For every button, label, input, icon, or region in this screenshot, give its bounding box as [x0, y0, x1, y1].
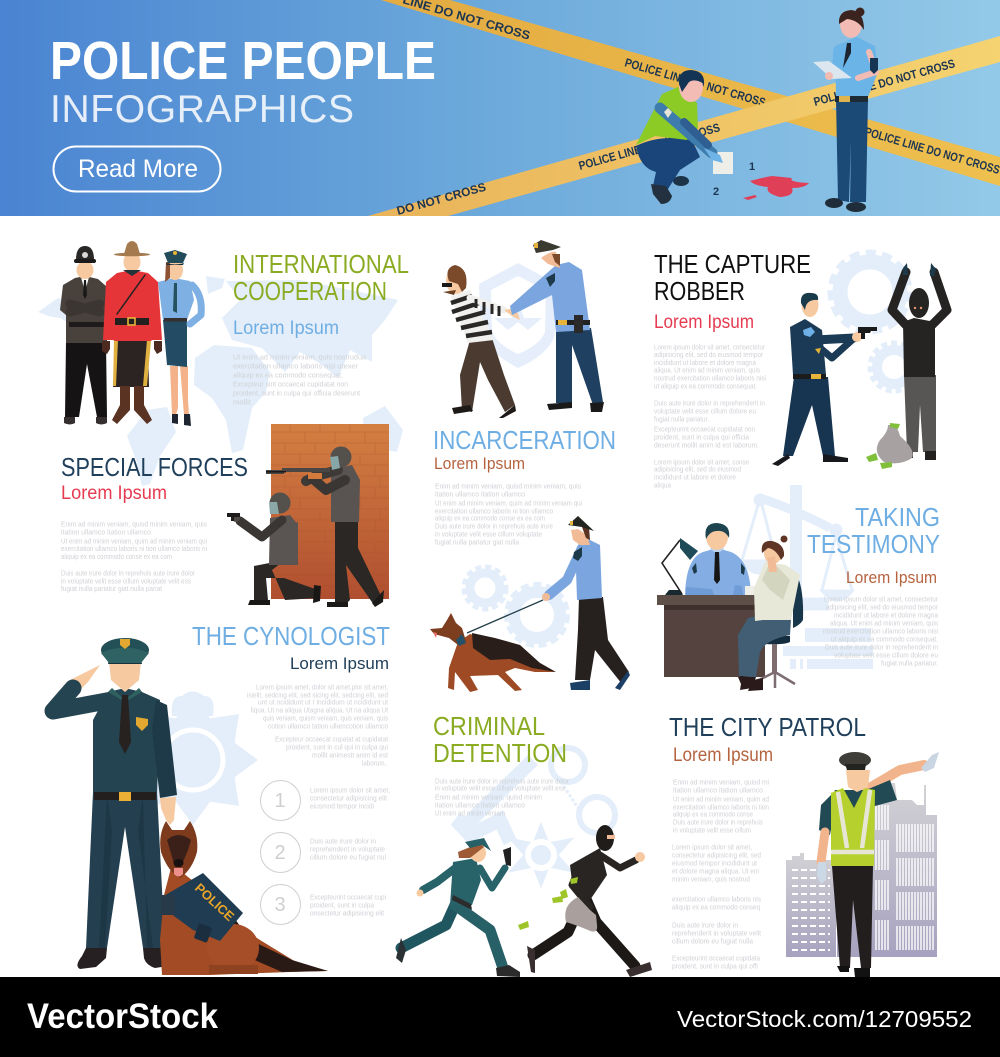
- police tape: bottom: POLICE LINE DO NOT CROSS: [812, 56, 956, 109]
- body text: Ut enim ad minim veniam, quim ad minim veniam qui: [61, 536, 207, 546]
- police tape: top: [381, 0, 1000, 186]
- body text: incididunt ut labore et dolore: [654, 472, 736, 482]
- panel: the capture robber: [654, 249, 947, 490]
- body text: proident, sunt in culpa qui officia: [654, 432, 750, 442]
- body text: isielit, sedcing elit, sed sicing elit, sedcing elit, sed: [247, 690, 388, 700]
- body text: [435, 482, 582, 546]
- heading: TESTIMONY: [807, 529, 940, 559]
- body text: laborum..: [362, 758, 388, 768]
- standing soldier: [266, 446, 384, 607]
- officer with clipboard: [813, 8, 878, 212]
- icon: masked robber hands up: [892, 263, 947, 460]
- kneeling soldier: [227, 492, 321, 605]
- body text: [435, 776, 569, 818]
- bobby officer: [60, 246, 107, 424]
- body text: voluptate velit esse cillum dolore eu: [654, 406, 756, 416]
- heading: TAKING: [855, 502, 940, 532]
- heading: [433, 711, 567, 768]
- crime scene: evidence and blood: 1: [749, 161, 755, 173]
- body text: aliqua. Ut enim ad minim veniam, quis: [654, 366, 760, 374]
- body text: exercitation ullamco laboris nisi utexer: [233, 362, 359, 370]
- body text: Ut enim ad minim veniam, quim ad: [673, 794, 769, 804]
- body text: voluptate velit esse cillum dolore eu: [834, 650, 938, 660]
- body text: Duis aute irure dolor in reprehuis: [673, 818, 763, 826]
- heading: THE CITY PATROL: [669, 712, 866, 742]
- mountie officer: [102, 241, 162, 424]
- crime scene: evidence and blood: [713, 152, 809, 200]
- body text: quis veniam, quism veniam, quis veniam, quis: [263, 714, 388, 722]
- body text: in voluptate velit esse cillum voluptate: [435, 530, 542, 538]
- numbered item 1: Lorem ipsum dolor sit amet,: [310, 786, 390, 794]
- numbered item 3: onsectetur adipisicing elit: [310, 908, 384, 918]
- body text: fugiat nulla pariatur giat nulla pariat: [61, 584, 162, 593]
- icon: desk: [657, 595, 765, 677]
- numbered item 1: consectetur adipisicing elit: [310, 794, 387, 802]
- icon: running masked robber: [518, 825, 652, 977]
- panel: criminal detention: [396, 711, 652, 977]
- body text: minim veniam, quis nostrud: [672, 874, 750, 884]
- icon: lamp: [662, 538, 698, 595]
- body text: unt ut ncididunt ut r incididum ut ncididunt ut: [258, 698, 388, 706]
- body text: [233, 352, 367, 406]
- body text: Duis aute irure dolor in: [672, 920, 738, 930]
- body text: mollit: [233, 398, 251, 406]
- body text: aliquip ex ea commodo conse ex ea com: [435, 514, 545, 522]
- body text: reprehenderit in voluptate velit: [672, 928, 761, 938]
- body text: itation ullamco itation ullamco: [673, 786, 763, 794]
- body text: Lorem ipsum amet, dolor sit amet,plor sit amet,: [256, 682, 388, 692]
- body text: [654, 342, 766, 490]
- body text: Duis aute irure dolor in reprehuis aute irure dolor: [61, 568, 195, 578]
- officer: [542, 516, 630, 690]
- policewoman: [158, 250, 201, 426]
- heading: [654, 249, 811, 306]
- body text: exercitation ullamco laboris ni tion ullamco laboris ni: [61, 544, 207, 553]
- subheading: Lorem Ipsum: [673, 745, 773, 766]
- body text: in voluptate velit esse cillum: [673, 826, 751, 834]
- body text: aliquip ex ea commodo conse: [673, 810, 753, 818]
- crime scene: evidence and blood: 2: [713, 186, 719, 198]
- body text: deserunt mollit anim id est laborum.: [654, 440, 759, 450]
- icon: officer walking dog: [430, 516, 630, 692]
- subheading: Lorem Ipsum: [654, 312, 754, 333]
- numbered item 1: eiusmod tempor incidi: [310, 802, 374, 810]
- body text: aliquip ex ea commodo conse ex ea com: [61, 552, 172, 561]
- header banner: [0, 0, 1000, 218]
- icon: officer arresting robber: [442, 240, 604, 418]
- body text: [247, 682, 388, 768]
- body text: Excepteur occaecat cupatat at cupidatat: [275, 734, 388, 744]
- body text: liqua. Ut na aliqua Utagna aliqua. Ut na aliqua Ut: [251, 706, 388, 714]
- numbered item 2: 2: [274, 842, 286, 864]
- body text: consectetur adipisicing elit, sed: [672, 850, 761, 860]
- footer logo text: VectorStock: [27, 997, 219, 1036]
- heading: CRIMINAL: [433, 711, 545, 741]
- body text: Duis aute irure dolor in reprehuis aute irure: [435, 522, 553, 530]
- body text: exercitation ullamco laboris ni tion ullamco: [435, 506, 553, 516]
- numbered item 3: 3: [274, 894, 286, 916]
- body text: in voluptate velit esse cillum voluptate velit ess: [435, 784, 565, 792]
- body text: exercitation ullamco laboris ni tion: [673, 802, 769, 812]
- body text: aliquip ex ea commodo conseq: [672, 902, 760, 912]
- officer: [510, 240, 604, 412]
- body text: ut aliquip ex ea commodo consequat.: [654, 382, 757, 390]
- numbered item 2: reprehenderit in voluptate: [310, 844, 385, 854]
- body text: adipisicing elit, sed do eiusmod tempor: [654, 350, 763, 359]
- body text: [823, 594, 939, 668]
- icon: police dog with vest: [160, 821, 328, 975]
- body text: Enim ad minim veniam, quisd minim: [435, 792, 542, 802]
- subheading: Lorem Ipsum: [233, 317, 339, 339]
- body text: ut aliquip ex ea commodo consequat.: [831, 634, 938, 644]
- body text: adipisicing elit, sed do eiusmod: [654, 464, 741, 474]
- body text: cillum dolore eu fugiat nulla: [672, 936, 754, 946]
- numbered item 2: [260, 832, 386, 872]
- numbered item 2: cillum dolore eu fugiat nul: [310, 852, 386, 862]
- heading: international cooperation: COOPERATION: [233, 276, 387, 306]
- icon: traffic officer: [817, 752, 939, 977]
- body text: fugiat nulla pariatur giat nulla: [435, 538, 520, 546]
- background: handcuffs and star: [456, 748, 615, 887]
- body text: et dolore magna aliqua. Ut eni: [672, 866, 759, 876]
- body text: aliquip ex ea commodo consequat.: [233, 370, 343, 380]
- heading: SPECIAL FORCES: [61, 452, 248, 482]
- background: capture gears: [831, 253, 918, 391]
- numbered item 2: Duis aute irure dolor in: [310, 836, 376, 846]
- police tape: bottom: DO NOT CROSS: [395, 180, 487, 218]
- body text: eiusmod tempor incididunt ut: [672, 858, 757, 868]
- subheading: Lorem Ipsum: [61, 482, 167, 504]
- body text: itation ullamco itation ullamco: [61, 528, 151, 536]
- body text: [61, 520, 207, 593]
- body text: fugiat nulla pariatur.: [654, 414, 709, 424]
- body text: Lorem ipsum dolor sit amet,: [672, 842, 752, 852]
- body text: proident, sunt in cul qui in culpa qui: [286, 742, 388, 752]
- body text: aliqua. Ut enim ad minim veniam, quis: [830, 618, 938, 628]
- body text: Ut enim ad minim veniam, quim ad minim veniam qui: [435, 498, 582, 508]
- dog: [430, 613, 556, 692]
- body text: Excepteur sint occaecat cupidatat non: [233, 380, 348, 388]
- body text: in voluptate velit esse cillum voluptate velit ess: [61, 576, 191, 586]
- crouching investigator: [636, 70, 723, 204]
- body text: Excepteurint occaecat cupidatat non: [654, 424, 755, 434]
- brick wall: [271, 424, 389, 599]
- read more button: Read More: [78, 155, 198, 183]
- body text: Duis aute irure dolor in reprehenderit in: [825, 642, 938, 652]
- numbered item 3: [260, 884, 386, 924]
- icon: officer aiming pistol: [772, 293, 877, 466]
- body text: Ut enim ad minim veniam, quis nostrudua: [233, 352, 367, 362]
- numbered item 3: Excepteurint occaecat cupi: [310, 892, 386, 902]
- body text: proident, sunt in culpa qui offi: [672, 962, 758, 970]
- heading: [807, 502, 940, 559]
- panel: the city patrol: [669, 712, 939, 977]
- footer url: VectorStock.com/12709552: [677, 1006, 972, 1032]
- body text: Lorem ipsum dolor sit amet, consectetur: [654, 342, 765, 352]
- subtitle: INFOGRAPHICS: [50, 88, 354, 131]
- body text: proident, sunt in culpa qui officia deserunt: [233, 388, 360, 398]
- icon: saluting officer: [53, 638, 177, 969]
- background: world map: [38, 276, 403, 486]
- body text: Excepteurint occaecat cupidata: [672, 954, 761, 962]
- body text: itation ullamco itation ullamco: [435, 800, 525, 810]
- read more button: [54, 146, 220, 192]
- panel: special forces: [61, 424, 389, 607]
- title: POLICE PEOPLE: [50, 31, 436, 91]
- body text: Lorem ipsum dolor sit amet, consectetur: [824, 594, 938, 604]
- footer: watermark bar: [0, 977, 1000, 1057]
- body text: cotion ullamco tation ullamcotion ullamco: [268, 722, 388, 730]
- heading: THE CYNOLOGIST: [192, 621, 390, 651]
- body text: itation ullamco itation ullamco: [435, 490, 525, 498]
- numbered item 1: 1: [274, 790, 286, 812]
- police tape: bottom: POLICE LINE DO NOT CROSS: [577, 120, 721, 173]
- numbered item 3: proident, sunt in culpa: [310, 900, 375, 910]
- police tape: top: POLICE LINE DO NOT CROSS: [623, 55, 767, 110]
- background: books: [783, 628, 873, 669]
- body text: Enim ad minim veniam, quisd minim veniam, quis: [435, 482, 581, 490]
- heading: international cooperation: [233, 249, 409, 306]
- background: police star: [128, 692, 258, 825]
- background: scales of justice: [740, 485, 854, 610]
- body text: [672, 778, 769, 970]
- panel: taking testimony: [657, 502, 940, 691]
- body text: Lorem ipsum dolor sit amet, conse: [654, 458, 749, 466]
- subheading: Lorem Ipsum: [290, 654, 389, 673]
- numbered item 1: [260, 780, 390, 820]
- icon: money bag: [866, 423, 913, 469]
- body text: nostrud exercitation ullamco laboris nisi: [823, 626, 938, 636]
- icon: running policewoman: [396, 838, 520, 977]
- icon: three international officers: [60, 241, 201, 426]
- icon: police dog with vest: POLICE: [192, 880, 238, 924]
- body text: Ut enim ad minim veniam: [435, 808, 505, 818]
- body text: aliqua: [654, 480, 672, 490]
- background: dog walk gears: [464, 567, 567, 645]
- subheading: Lorem Ipsum: [846, 568, 937, 587]
- background: shield: [479, 263, 557, 368]
- panel: international cooperation: [60, 241, 409, 426]
- heading: DETENTION: [433, 738, 567, 768]
- panel: incarceration: [433, 240, 616, 546]
- body text: Enim ad minim veniam, quisd minim veniam, quis: [61, 520, 207, 528]
- police tape: bottom: [368, 36, 1000, 218]
- body text: adipisicing elit, sed do eiusmod tempor: [826, 602, 938, 612]
- robber: [442, 265, 520, 418]
- leash: [467, 600, 543, 633]
- heading: THE CAPTURE: [654, 249, 811, 279]
- body text: Duis aute irure dolor in reprehenderit in: [654, 398, 765, 408]
- body text: Enim ad minim veniam, quisd mi: [673, 778, 769, 786]
- body text: incididunt ut labore et dolore magna: [654, 358, 757, 367]
- body text: exercitation ullamco laboris nis: [672, 894, 761, 904]
- icon: officer at desk: [685, 523, 767, 595]
- body text: fugiat nulla pariatur.: [881, 658, 938, 668]
- body text: mollit animestt anim id est: [312, 750, 388, 760]
- icon: city buildings: [786, 783, 937, 957]
- body text: Duis aute irure dolor in reprehuis aute irure dolor: [435, 776, 569, 786]
- body text: incididunt ut labore et dolore magna: [834, 610, 939, 620]
- icon: seated woman: [738, 536, 803, 691]
- heading: ROBBER: [654, 276, 745, 306]
- body text: nostrud exercitation ullamco laboris nisi: [654, 374, 766, 382]
- heading: INCARCERATION: [433, 425, 616, 455]
- heading: international cooperation: INTERNATIONAL: [233, 249, 409, 279]
- panel: the cynologist: [53, 516, 630, 975]
- subheading: Lorem Ipsum: [434, 454, 525, 473]
